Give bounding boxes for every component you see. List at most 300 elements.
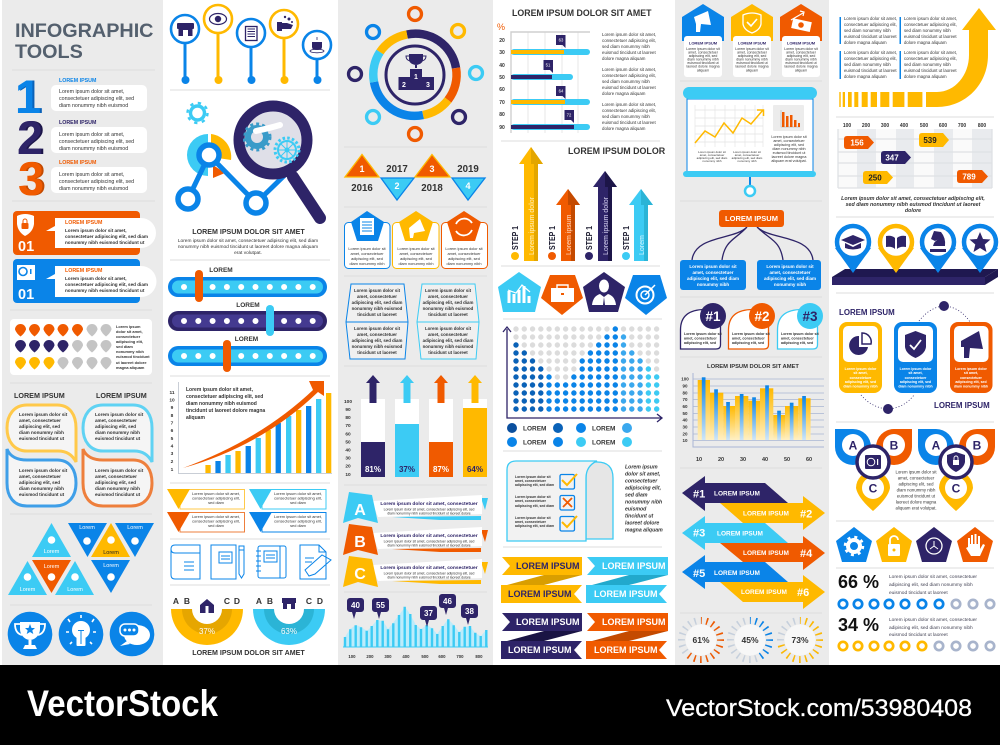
triangle notes: sed diam [208,500,224,505]
icon: book [171,545,200,579]
card #2 [728,303,775,349]
ribbon orange: LOREM IPSUM [602,617,666,627]
bars with arrows: 90 [345,407,351,413]
card yellow: LOREM IPSUM [738,40,767,46]
card: orange 01: Lorem ipsum dolor sit amet, [65,228,127,233]
bubble blue [7,449,76,506]
stat 66 percent: adipiscing elit, sed diam nonummy nibh [889,582,973,588]
pentagon cards: amet, consectetuer [447,251,481,256]
pin text: Lorem ipsum [116,324,141,329]
icon: safe [17,265,35,280]
gauge 73%: 73% [791,635,809,645]
pentagon cards: adipiscing elit, sed [400,256,432,261]
icon: gear [188,103,208,123]
bubble text: amet, consectetuer [95,418,137,423]
illustration: magnifier and analytics: Lorem ipsum dolor sit amet, consectetuer adipiscing elit, sed diam [178,238,318,244]
projector screen: nonummy nibh [738,159,757,163]
list item 1: LOREM IPSUM [59,78,97,84]
number 1: 1 [15,70,41,123]
faceted boxes: amet, consectetuer [428,294,468,299]
ribbons [501,557,668,659]
timeline triangles: 1 [359,164,365,174]
bars with arrows: 60 [345,432,351,438]
ABC cluster 2: A [932,438,941,452]
ABC cluster 2: B [973,438,982,452]
top text blocks: Lorem ipsum dolor sit amet, [844,16,897,21]
top text blocks: dolore magna aliquam [904,74,947,79]
projector screen: diam nonummy nibh [772,147,806,151]
illustration: magnifier and analytics [178,103,320,256]
card blue: diam nonummy nibh [687,58,719,62]
icon: gear [836,527,872,562]
org chart: nonummy nibh [697,282,729,287]
pin text: magna aliquam [116,365,145,370]
arrow: cyan: Lorem [639,235,646,255]
ABC text [895,470,937,510]
faceted boxes: nonummy nibh euismod [423,306,474,311]
horizontal bar chart: 40 [499,63,505,69]
arrow: big curved yellow [839,8,996,107]
card: orange 01: consectetuer adipiscing elit, sed diam [65,234,148,239]
growth bar chart: 11 [169,390,175,396]
checklist note: adipiscing elit, [625,486,661,492]
banner C: diam nonummy nibh euismod tincidunt ut laoreet dolore [387,576,471,580]
legend: LOREM [592,440,615,446]
icon: refresh [456,219,472,235]
bars with arrows: 30 [345,456,351,462]
timeline triangles: 2 [394,181,400,191]
org chart: amet, consectetuer [692,270,734,275]
top text blocks: euismod tincidunt ut laoreet [904,34,957,39]
top text blocks: dolore magna aliquam [844,40,887,45]
timeline table: dolore [905,208,921,214]
bars with arrows: 100 [344,399,352,405]
card: blue 01: consectetuer adipiscing elit, sed diam [65,282,148,287]
icon: safe [865,455,881,469]
card yellow: aliquam [746,68,758,72]
icon: hand with coins [277,16,293,31]
projector screen: adipiscing elit, sed diam [697,156,728,160]
line chart [178,145,290,213]
icon: hand [957,527,993,562]
card orange: diam nonummy nibh [954,384,988,388]
faceted boxes: nonummy nibh euismod [352,344,403,349]
bubble text: adipiscing elit, sed [19,424,60,429]
pentagon cards: diam nonummy nibh [398,261,434,266]
bars with arrows: 80 [345,415,351,421]
list item 3 [51,160,147,193]
faceted boxes: amet, consectetuer [357,294,397,299]
card #1: Lorem ipsum dolor sit [684,332,723,336]
footer bar [0,665,1000,745]
number 3: 3 [20,152,46,205]
icon: trophy [8,612,52,656]
timeline table: sed diam nonummy nibh euismod tincidunt ut laoreet [846,202,981,208]
card orange: sit amet, [964,371,978,375]
projector screen: adipiscing elit, sed diam [732,156,763,160]
line chart [695,105,764,147]
triangle notes: consectetuer adipiscing elit, [274,496,322,500]
spike chart: 200 [366,654,374,659]
horizontal bar chart: consectetuer adipiscing elit, [602,108,656,113]
bubble text: adipiscing elit, sed [95,480,136,485]
triangle notes: Lorem ipsum dolor sit amet, [192,491,240,496]
card blue: consectetuer [905,376,927,380]
card #3: adipiscing elit, sed [781,341,813,345]
timeline table: 600 [939,123,947,129]
panel: triangles: Lorem [103,550,119,556]
card: blue 01 [13,259,156,303]
checklist note: nonummy nibh [625,500,662,506]
top text blocks: sed diam nonummy nibh [904,28,951,33]
banner B: Lorem ipsum dolor sit amet, consectetuer [380,533,478,539]
timeline triangles: 3 [429,164,435,174]
checklist: Lorem ipsum dolor sit [515,475,551,479]
stat 66 percent: euismod tincidunt ut laoreet [889,590,948,596]
icon: podium and trophy: 2 [402,82,406,89]
mini bar icon [773,105,804,131]
checklist: amet, consectetuer [515,479,547,483]
combo bar chart: 10 [682,438,688,443]
pin text: sed diam [116,344,133,349]
banner A: Lorem ipsum dolor sit amet, consectetuer [380,501,478,507]
card yellow: amet, consectetuer [737,50,768,54]
icon: megaphone [409,219,425,238]
checklist: Lorem ipsum dolor sit [515,516,551,520]
card orange: adipiscing elit, sed [955,380,987,384]
card orange [780,4,822,77]
banner B: diam nonummy nibh euismod tincidunt ut laoreet dolore [387,544,471,548]
card orange: Lorem ipsum dolor [955,367,987,371]
org chart: nonummy nibh [774,282,806,287]
arrow #6 [720,575,825,609]
panel: speech bubbles [7,391,152,506]
checklist note: consectetuer [625,478,658,484]
panel: triangles: Lorem [103,563,119,569]
timeline table: 100 [843,123,851,129]
banner B: B [354,534,366,551]
A B C banners [343,492,488,587]
icon: shield check [743,13,761,33]
number 2: 2 [19,111,45,164]
ribbon yellow: LOREM IPSUM [508,589,572,599]
bubble text: euismod tincidunt ut [95,492,141,497]
bar value tags: 72 [567,112,572,118]
sliders [168,267,327,372]
horizontal bar chart: dolore magna aliquam [602,56,646,61]
faceted boxes: adipiscing elit, sed diam [352,338,402,343]
bubble text: diam nonummy nibh [19,430,64,435]
spike chart: 400 [402,654,410,659]
top text blocks: euismod tincidunt ut laoreet [904,68,957,73]
org chart: adipiscing elit, sed diam [764,276,816,281]
card #3: Lorem ipsum dolor sit [781,332,820,336]
title: INFOGRAPHIC [15,20,153,42]
list item 2: LOREM IPSUM [59,120,97,126]
arrow: cyan: STEP 1 [621,226,631,250]
horizontal bar chart: 90 [499,125,505,131]
slider 3 [168,336,327,372]
illustration: magnifier and analytics: erat volutpat. [234,250,262,256]
combo bar chart: LOREM IPSUM DOLOR SIT AMET [707,364,799,370]
pins row [171,5,331,84]
top text blocks: sed diam nonummy nibh [844,62,891,67]
checklist: amet, consectetuer [515,520,547,524]
icon: shield lock [947,452,965,472]
ribbon cyan: LOREM IPSUM [594,589,658,599]
faceted boxes: Lorem ipsum dolor sit [354,326,401,331]
pentagon cards: diam nonummy nibh [349,261,385,266]
step arrows [510,147,653,261]
combo bar chart: 60 [682,404,688,409]
card blue: diam nonummy nibh [898,384,933,388]
bars with arrows: 40 [345,448,351,454]
card yellow: adipiscing elit, sed [738,54,766,58]
process cards [839,301,992,414]
list item 1: Lorem ipsum dolor sit amet, [59,89,124,95]
triangle notes: consectetuer adipiscing elit, [274,518,322,524]
arrow #1: LOREM IPSUM [714,490,760,498]
card orange [950,322,992,393]
magnifying glass [239,106,320,218]
card #3 [778,303,823,349]
bubble text: Lorem ipsum dolor sit [95,468,144,473]
process cards: LOREM IPSUM [934,401,990,410]
bubble text: amet, consectetuer [19,418,61,423]
donut 63%: D [317,596,323,606]
icon: money [791,11,812,32]
icon: document [360,218,374,235]
icon: document and pen [300,545,331,579]
arrow #1: #1 [693,488,705,500]
bubble text: Lorem ipsum dolor sit [19,412,68,417]
tags [844,133,988,184]
faceted boxes: amet, consectetuer [428,332,468,337]
projector screen: amet, consectetuer [773,139,805,143]
footer bar: VectorStock [27,683,218,724]
card #3: #3 [802,309,818,324]
arrow #5 [682,555,788,589]
map pins on platform [832,226,998,285]
spike chart: 55 [376,601,385,610]
growth bar chart: 10 [169,398,175,404]
top text blocks: Lorem ipsum dolor sit amet, [904,16,957,21]
bars with arrows: 20 [345,464,351,470]
growth bar chart: 2 [171,459,174,465]
pentagon: chart [498,272,541,312]
bars with arrows: 50 [345,440,351,446]
donut 37%: A [173,596,179,606]
pie [187,134,231,178]
pin: graduation [835,226,871,273]
list item 3: diam nonummy nibh euismod [59,186,128,192]
ribbon navy: LOREM IPSUM [516,617,580,627]
top text blocks: dolore magna aliquam [844,74,887,79]
orange pins [15,324,83,336]
donut 37%: D [234,596,240,606]
card yellow: consectetuer [850,376,872,380]
horizontal bar chart: sed diam nonummy nibh [602,114,650,119]
checklist: adipiscing elit, sed diam [515,504,554,508]
card #2: Lorem ipsum dolor sit [732,332,771,336]
org chart [680,210,821,290]
timeline triangles: 2019 [457,164,479,175]
navy pins [15,340,68,352]
line icons [171,545,331,579]
projector screen: Lorem ipsum dolor sit [733,150,761,154]
bubble yellow [7,405,76,462]
pentagon cards [344,211,488,268]
list item 2 [51,120,147,153]
horizontal bar chart: Lorem ipsum dolor sit amet, [602,32,656,37]
top text blocks: sed diam nonummy nibh [904,62,951,67]
card: orange 01: nonummy nibh euismod tincidunt ut [65,240,145,245]
org chart: LOREM IPSUM [725,214,778,223]
bubble text: euismod tincidunt ut [19,436,65,441]
panel: speech bubbles: LOREM IPSUM [14,391,65,400]
card yellow: laoreet dolore magna [735,64,769,68]
card #2: #2 [754,309,770,324]
bubble text: diam nonummy nibh [95,430,140,435]
tags: 539 [923,136,937,145]
combo bar chart: 50 [784,457,790,463]
stat 66 percent [838,572,994,608]
ribbon cyan [586,557,668,603]
bubble text: diam nonummy nibh [19,486,64,491]
arrow: orange: Lorem ipsum [566,214,573,255]
triangle notes: consectetuer adipiscing elit, [192,518,240,524]
bubble text: diam nonummy nibh [95,486,140,491]
banner B: Lorem ipsum dolor sit amet, consectetuer adipiscing elit, sed [384,540,475,544]
horizontal bar chart: Lorem ipsum dolor sit amet, [602,67,656,72]
slider 2: LOREM [236,302,260,309]
card #1: #1 [705,309,721,324]
bubble text: Lorem ipsum dolor sit [95,412,144,417]
pin text [116,324,150,370]
horizontal bar chart: consectetuer adipiscing elit, [602,73,656,78]
faceted boxes: nonummy nibh euismod [352,306,403,311]
horizontal bar chart: dolore magna aliquam [602,91,646,96]
growth bar chart: Lorem ipsum dolor sit amet, [186,387,254,393]
timeline triangles: 4 [465,181,471,191]
pentagon cards: Lorem ipsum dolor sit [348,246,387,251]
panel: triangles: Lorem [44,564,60,570]
pentagon cards: adipiscing elit, sed [448,256,480,261]
slider 3: LOREM [235,336,258,343]
horizontal bar chart: euismod tincidunt ut laoreet [602,85,656,90]
combo bar chart: 60 [806,457,812,463]
card yellow: diam nonummy nibh [736,58,768,62]
tags: 789 [962,172,976,182]
faceted boxes: adipiscing elit, sed diam [423,300,473,305]
donut 63% [253,596,325,645]
number 3: 3 [18,152,44,205]
top text blocks: euismod tincidunt ut laoreet [844,34,897,39]
legend: LOREM [592,426,615,432]
bars with arrows: 37% [399,465,415,474]
card blue: laoreet dolore magna [686,64,720,68]
list item 3: consectetuer adipiscing elit, sed [59,179,134,185]
triangle notes: sed diam [290,500,306,505]
card blue: sit amet, [908,371,923,375]
card yellow: euismod tincidunt ut [736,61,768,65]
list item 3: LOREM IPSUM [59,160,97,166]
projector screen: aliquam erat volutpat. [771,159,807,163]
banner C: Lorem ipsum dolor sit amet, consectetuer adipiscing elit, sed [384,572,475,576]
combo bar chart: 50 [682,411,688,416]
triangle notes [167,489,326,532]
spike chart [343,594,488,659]
arrow #2: LOREM IPSUM [743,510,789,518]
faceted boxes: amet, consectetuer [357,332,397,337]
heading: horizontal bars: LOREM IPSUM DOLOR SIT AMET [512,8,652,18]
ABC text: adipiscing elit, sed [898,482,934,486]
bubble text: Lorem ipsum dolor sit [19,468,68,473]
checklist note: dolor sit amet, [625,472,660,478]
panel: triangles [8,523,154,595]
semi donut charts: LOREM IPSUM DOLOR SIT AMET [192,649,305,657]
horizontal bar chart: 20 [499,38,505,44]
combo bar chart: 70 [682,397,688,402]
top text blocks: consectetuer adipiscing elit, [844,56,897,61]
arrows up [366,375,482,403]
horizontal bar chart: sed diam nonummy nibh [602,44,650,49]
growth bar chart: 4 [171,444,174,450]
checklist note [625,464,663,534]
card blue: LOREM IPSUM [689,40,718,46]
top text blocks: sed diam nonummy nibh [844,28,891,33]
timeline triangles: 2016 [351,183,373,194]
ribbon yellow: LOREM IPSUM [516,561,580,571]
illustration: magnifier and analytics: LOREM IPSUM DOLOR SIT AMET [192,228,305,236]
icon: podium and trophy: 3 [426,82,430,89]
ABC text: euismod tincidunt ut [897,494,936,498]
growth bar chart: 9 [171,405,174,411]
radial gauges [682,620,820,660]
faceted boxes [346,284,479,359]
checklist: Lorem ipsum dolor sit [515,495,551,499]
banner B [343,524,488,555]
tags: 156 [850,138,864,148]
growth bar chart [169,381,332,474]
bubble orange [83,449,152,506]
checklist: adipiscing elit, sed diam [515,483,554,487]
pin text: dolor sit amet, [116,329,143,334]
projector screen: Lorem ipsum dolor sit [698,150,726,154]
ABC cluster 1: B [890,438,899,452]
org chart: Lorem ipsum dolor sit [766,264,814,269]
icon: shield lock [17,214,34,236]
timeline table [838,123,992,214]
card blue: euismod tincidunt ut [687,61,719,65]
ribbon yellow [501,557,582,603]
checklist note: laoreet dolore [625,520,659,526]
donut with podium [348,8,482,140]
horizontal bar chart: % [497,22,505,32]
icon: speech bubble [110,612,154,656]
bars with arrows: 87% [433,465,449,474]
ABC cluster 1: A [849,438,858,452]
axes [503,327,662,422]
projector screen: amet, consectetuer [700,153,724,157]
banner A: A [354,502,366,519]
growth bar chart: 8 [171,413,174,419]
checklist note: tincidunt ut [625,514,654,520]
pin text: consectetuer [116,334,141,339]
bar value tags: 51 [546,62,551,68]
panel: speech bubbles: LOREM IPSUM [96,391,147,400]
timeline table: 400 [900,123,908,129]
